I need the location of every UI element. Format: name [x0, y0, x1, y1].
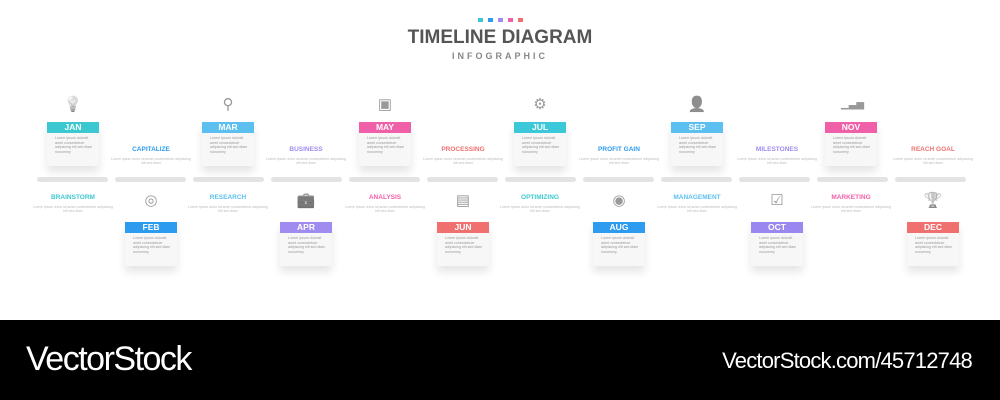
label ANALYSIS: Lorem ipsum dolor sit amet consectetuer adipiscing elit sed diam	[345, 205, 425, 213]
label MANAGEMENT: Lorem ipsum dolor sit amet consectetuer adipiscing elit sed diam	[657, 205, 737, 213]
card JAN: JAN	[64, 122, 82, 132]
card OCT: Lorem ipsum dolorsit amet consectetuer adipiscing elit sed diam nonummy	[759, 236, 796, 254]
card DEC	[907, 222, 959, 266]
card FEB	[125, 222, 177, 266]
card SEP: SEP	[688, 122, 706, 132]
card MAR: MAR	[218, 122, 238, 132]
icon: search: ⚲	[222, 96, 234, 113]
icon: map: ▤	[456, 192, 470, 209]
label REACH GOAL	[893, 146, 973, 165]
card MAR	[202, 122, 254, 166]
label REACH GOAL: REACH GOAL	[911, 146, 955, 153]
card MAY: Lorem ipsum dolorsit amet consectetuer adipiscing elit sed diam nonummy	[367, 136, 404, 154]
label PROFIT GAIN: Lorem ipsum dolor sit amet consectetuer adipiscing elit sed diam	[579, 157, 659, 165]
card OCT: OCT	[768, 222, 786, 232]
card SEP	[671, 122, 723, 166]
label BUSINESS	[266, 146, 346, 165]
label BRAINSTORM	[33, 194, 113, 213]
label PROCESSING: Lorem ipsum dolor sit amet consectetuer adipiscing elit sed diam	[423, 157, 503, 165]
label PROCESSING	[423, 146, 503, 165]
label OPTIMIZING	[500, 194, 580, 213]
footer brand: VectorStock	[26, 340, 191, 378]
icon: briefcase: 💼	[297, 192, 315, 209]
label CAPITALIZE: Lorem ipsum dolor sit amet consectetuer adipiscing elit sed diam	[111, 157, 191, 165]
card JUN	[437, 222, 489, 266]
card JUN: Lorem ipsum dolorsit amet consectetuer adipiscing elit sed diam nonummy	[445, 236, 482, 254]
card MAR: Lorem ipsum dolorsit amet consectetuer adipiscing elit sed diam nonummy	[210, 136, 247, 154]
card NOV: NOV	[842, 122, 860, 132]
label PROFIT GAIN: PROFIT GAIN	[598, 146, 640, 153]
label CAPITALIZE: CAPITALIZE	[132, 146, 170, 153]
label ANALYSIS: ANALYSIS	[369, 194, 401, 201]
label MANAGEMENT: MANAGEMENT	[673, 194, 721, 201]
label BUSINESS: Lorem ipsum dolor sit amet consectetuer adipiscing elit sed diam	[266, 157, 346, 165]
label PROCESSING: PROCESSING	[441, 146, 485, 153]
card APR: Lorem ipsum dolorsit amet consectetuer adipiscing elit sed diam nonummy	[288, 236, 325, 254]
footer url: VectorStock.com/45712748	[722, 348, 972, 373]
card JUN: JUN	[454, 222, 472, 232]
label MANAGEMENT	[657, 194, 737, 213]
card OCT	[751, 222, 803, 266]
label CAPITALIZE	[111, 146, 191, 165]
card MAY: MAY	[376, 122, 394, 132]
title: TIMELINE DIAGRAM	[408, 27, 592, 48]
icon: growth chart: ▁▃▅	[841, 99, 864, 110]
label BUSINESS: BUSINESS	[289, 146, 323, 153]
icon: person: 👤	[688, 96, 706, 113]
card NOV: Lorem ipsum dolorsit amet consectetuer adipiscing elit sed diam nonummy	[833, 136, 870, 154]
card FEB: FEB	[142, 222, 160, 232]
label BRAINSTORM: Lorem ipsum dolor sit amet consectetuer adipiscing elit sed diam	[33, 205, 113, 213]
label RESEARCH	[188, 194, 268, 213]
card JAN	[47, 122, 99, 166]
label MILESTONES: Lorem ipsum dolor sit amet consectetuer adipiscing elit sed diam	[737, 157, 817, 165]
label ANALYSIS	[345, 194, 425, 213]
label MILESTONES	[737, 146, 817, 165]
card JUL: JUL	[532, 122, 548, 132]
label MARKETING	[811, 194, 891, 213]
card AUG: AUG	[610, 222, 628, 232]
title: INFOGRAPHIC	[452, 51, 548, 61]
label MARKETING: MARKETING	[831, 194, 871, 201]
card JAN: Lorem ipsum dolorsit amet consectetuer adipiscing elit sed diam nonummy	[55, 136, 92, 154]
label MARKETING: Lorem ipsum dolor sit amet consectetuer adipiscing elit sed diam	[811, 205, 891, 213]
footer bar	[0, 320, 1000, 400]
label BRAINSTORM: BRAINSTORM	[51, 194, 95, 201]
label MILESTONES: MILESTONES	[756, 146, 798, 153]
label PROFIT GAIN	[579, 146, 659, 165]
icon: chart window: ▣	[378, 96, 392, 113]
label RESEARCH: Lorem ipsum dolor sit amet consectetuer adipiscing elit sed diam	[188, 205, 268, 213]
label RESEARCH: RESEARCH	[210, 194, 246, 201]
card AUG	[593, 222, 645, 266]
card SEP: Lorem ipsum dolorsit amet consectetuer adipiscing elit sed diam nonummy	[679, 136, 716, 154]
label OPTIMIZING: Lorem ipsum dolor sit amet consectetuer adipiscing elit sed diam	[500, 205, 580, 213]
icon: bulb: 💡	[64, 96, 82, 113]
timeline bars	[37, 177, 966, 182]
card NOV	[825, 122, 877, 166]
label REACH GOAL: Lorem ipsum dolor sit amet consectetuer adipiscing elit sed diam	[893, 157, 973, 165]
icon: money: ◎	[144, 192, 158, 209]
label OPTIMIZING: OPTIMIZING	[521, 194, 559, 201]
card FEB: Lorem ipsum dolorsit amet consectetuer adipiscing elit sed diam nonummy	[133, 236, 170, 254]
icon: coin: ◉	[612, 192, 626, 209]
card APR: APR	[297, 222, 315, 232]
title	[408, 18, 592, 61]
card APR	[280, 222, 332, 266]
icon: trophy: 🏆	[924, 192, 942, 209]
icon: checklist: ☑	[770, 192, 784, 209]
card JUL	[514, 122, 566, 166]
card AUG: Lorem ipsum dolorsit amet consectetuer adipiscing elit sed diam nonummy	[601, 236, 638, 254]
card DEC: Lorem ipsum dolorsit amet consectetuer adipiscing elit sed diam nonummy	[915, 236, 952, 254]
card JUL: Lorem ipsum dolorsit amet consectetuer adipiscing elit sed diam nonummy	[522, 136, 559, 154]
card DEC: DEC	[924, 222, 942, 232]
icon: gear: ⚙	[533, 96, 547, 113]
card MAY	[359, 122, 411, 166]
